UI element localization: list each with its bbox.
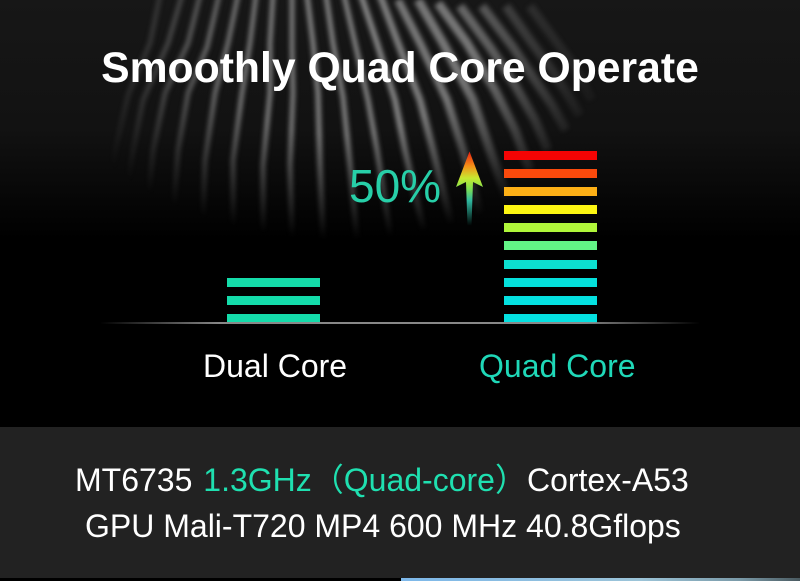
label: 50% increase: 50% xyxy=(349,160,441,212)
background: dark gradient with light stripes xyxy=(0,0,800,232)
panel: specifications xyxy=(0,427,800,578)
bar chart: dual core xyxy=(227,278,320,322)
icon: rainbow up arrow xyxy=(456,152,483,224)
title: Smoothly Quad Core Operate xyxy=(101,44,699,92)
bar chart: quad core xyxy=(504,151,597,323)
spec line: CPU: MT6735 1.3GHz（Quad-core）Cortex-A53 xyxy=(75,462,689,498)
label: quad core: Quad Core xyxy=(479,348,636,384)
bottom strip: next image edge xyxy=(401,578,800,581)
spec line: GPU: GPU Mali-T720 MP4 600 MHz 40.8Gflops xyxy=(85,508,681,544)
label: dual core: Dual Core xyxy=(203,348,347,384)
baseline axis xyxy=(108,322,693,324)
